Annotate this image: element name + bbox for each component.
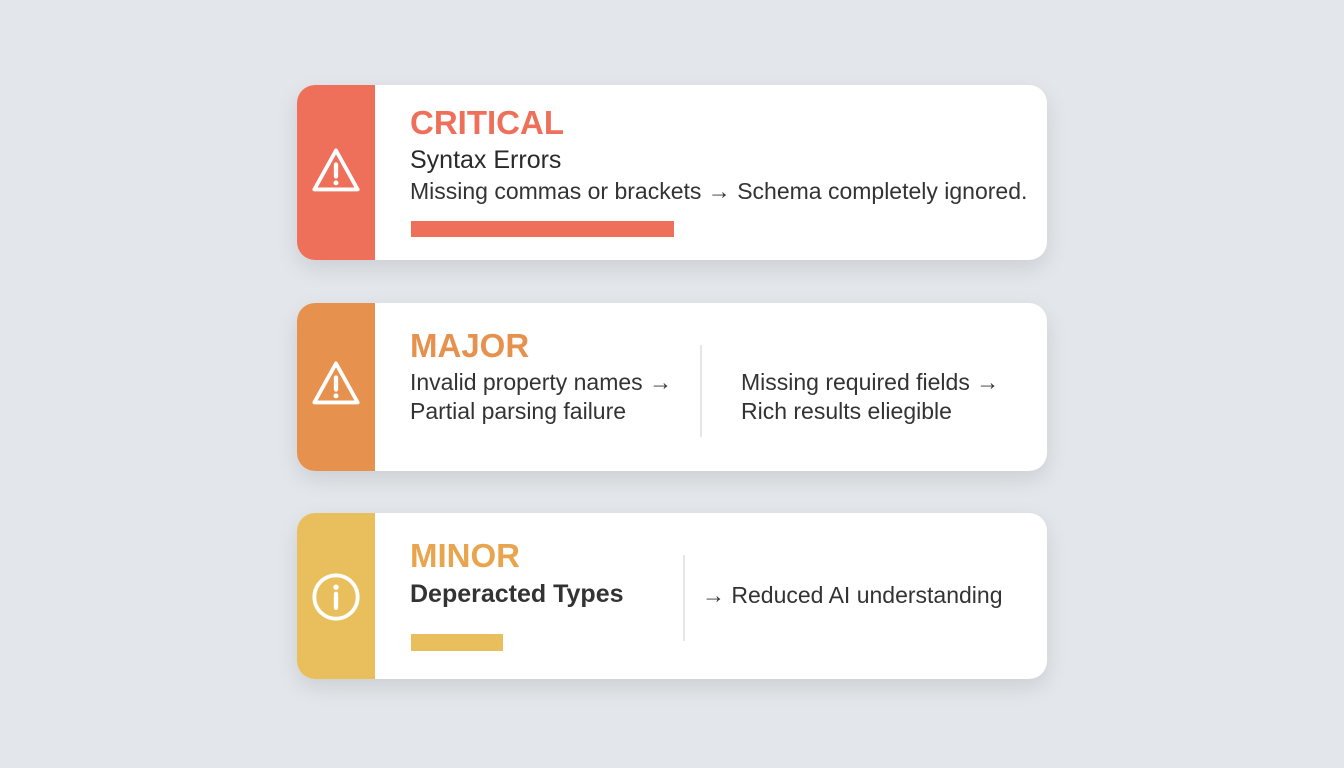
card: minor <box>297 513 1047 679</box>
description: Missing commas or brackets → Schema completely ignored. <box>410 178 1027 204</box>
icon: warning triangle <box>312 361 360 404</box>
icon: info circle <box>312 574 360 621</box>
right text: → Reduced AI understanding <box>702 582 1002 608</box>
left text: Partial parsing failure <box>410 398 626 424</box>
right text: Missing required fields → <box>741 369 999 395</box>
right text <box>741 369 999 424</box>
left text <box>410 369 672 424</box>
right text: Rich results eliegible <box>741 398 952 424</box>
severity bar <box>411 634 503 651</box>
heading: CRITICAL: CRITICAL <box>410 104 564 141</box>
heading: MAJOR: MAJOR <box>410 327 529 364</box>
left text: Invalid property names → <box>410 369 672 395</box>
subheading: Syntax Errors <box>410 146 561 174</box>
subheading: Deperacted Types <box>410 580 624 608</box>
card: major <box>297 303 1047 471</box>
card: critical <box>297 85 1047 260</box>
stripe: minor <box>297 513 375 679</box>
stripe: critical <box>297 85 375 260</box>
stripe: major <box>297 303 375 471</box>
icon: warning triangle <box>312 148 360 192</box>
heading: MINOR: MINOR <box>410 537 520 574</box>
severity bar <box>411 221 674 237</box>
